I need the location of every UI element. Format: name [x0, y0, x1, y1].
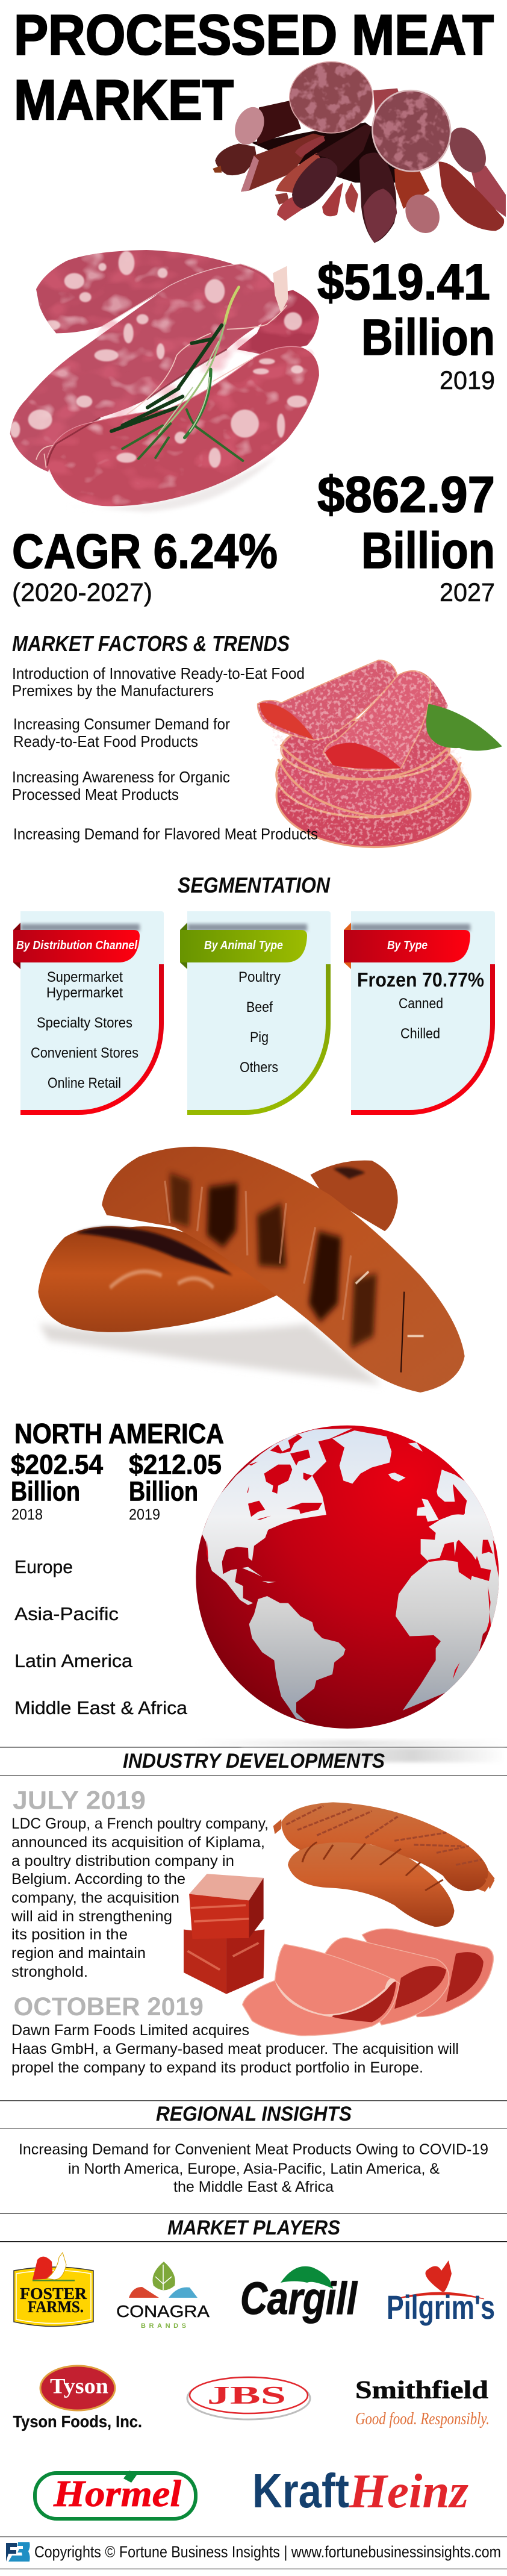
icon: rosemary sprig: [111, 287, 243, 461]
logo: Kraft Heinz: [252, 2464, 468, 2518]
CAGR: (2020-2027): [12, 578, 152, 607]
stat: north america 2019: [129, 1449, 222, 1523]
divider shadow above industry developments: [0, 1740, 507, 1748]
text block: market factors: Increasing Consumer Demand for: [13, 715, 230, 733]
market value 2027: $862.97: [317, 466, 495, 523]
CAGR: CAGR 6.24%: [12, 525, 278, 579]
image: assorted cured sausages: [213, 61, 506, 243]
text block: regional insights: in North America, Europe, Asia-Pacific, Latin America, &: [68, 2160, 440, 2177]
stat: north america 2018: 2018: [11, 1506, 43, 1523]
list: distribution channels: Specialty Stores: [37, 1015, 132, 1031]
heading: market factors and trends: MARKET FACTORS & TRENDS: [12, 631, 290, 656]
market value 2019: $519.41: [317, 254, 490, 310]
text block: market factors: [12, 664, 305, 803]
list: other regions: Middle East & Africa: [14, 1697, 188, 1718]
list: other regions: [14, 1556, 188, 1718]
text block: regional insights: [19, 2141, 488, 2195]
list: animal types: Beef: [246, 999, 273, 1015]
list: product types: [357, 968, 484, 1042]
image: grilled sausages: [38, 1147, 465, 1392]
icon: red globe: [196, 1426, 507, 1729]
logo: Foster Farms: FOSTER: [20, 2284, 87, 2303]
stat: north america 2018: $202.54: [11, 1449, 103, 1480]
text block: October 2019: [11, 1992, 459, 2076]
list: distribution channels: Supermarket: [47, 969, 123, 985]
stat: north america 2019: 2019: [129, 1506, 160, 1523]
logo: Tyson Foods: [13, 2366, 142, 2431]
heading: segmentation: SEGMENTATION: [178, 873, 331, 897]
panel: by animal type: By Animal Type: [204, 939, 283, 952]
logo: Conagra Brands: [116, 2262, 210, 2330]
logo: Kraft Heinz: Kraft: [252, 2464, 349, 2518]
panel: by type: [344, 911, 495, 1115]
text block: October 2019: Dawn Farm Foods Limited acquires: [11, 2022, 249, 2039]
list: distribution channels: Hypermarket: [46, 985, 123, 1001]
list: animal types: Others: [240, 1059, 278, 1076]
logo: JBS: JBS: [207, 2382, 286, 2410]
heading: market players: MARKET PLAYERS: [167, 2216, 340, 2239]
text block: October 2019: propel the company to expand its product portfolio in Europe.: [11, 2059, 423, 2076]
logo: Hormel: Hormel: [53, 2474, 182, 2515]
list: other regions: Europe: [14, 1556, 73, 1577]
logo: Conagra Brands: BRANDS: [141, 2322, 186, 2330]
panel: by type: By Type: [387, 939, 428, 952]
stat: north america 2019: $212.05: [129, 1449, 222, 1480]
text block: July 2019: region and maintain: [11, 1945, 146, 1962]
market value 2019: [317, 254, 495, 395]
heading: north america: NORTH AMERICA: [14, 1418, 224, 1449]
text block: market factors: Introduction of Innovative Ready-to-Eat Food: [12, 664, 305, 682]
logo: Smithfield: Smithfield: [355, 2377, 488, 2404]
text block: October 2019: OCTOBER 2019: [13, 1992, 204, 2021]
market value 2027: 2027: [440, 578, 495, 607]
stat: north america 2018: [11, 1449, 103, 1523]
text block: July 2019: a poultry distribution company in: [11, 1853, 234, 1870]
logo: Hormel: [35, 2471, 196, 2519]
text: flavored meat factor: Increasing Demand for Flavored Meat Products: [13, 825, 318, 843]
footer: [0, 2536, 507, 2569]
list: distribution channels: Convenient Stores: [31, 1045, 138, 1061]
image: raw sausages with rosemary: [6, 247, 319, 512]
market value 2027: [317, 466, 495, 607]
list: distribution channels: Online Retail: [48, 1075, 121, 1091]
icon: basil leaf: [426, 704, 502, 750]
logo: Cargill: Cargill: [240, 2273, 358, 2324]
text block: October 2019: Haas GmbH, a Germany-based meat producer. The acquisition will: [11, 2041, 459, 2057]
logo: JBS: [187, 2377, 310, 2419]
title: MARKET: [14, 68, 234, 131]
heading: regional insights: REGIONAL INSIGHTS: [156, 2103, 352, 2125]
text block: market factors: Ready-to-Eat Food Products: [13, 732, 198, 750]
list: distribution channels: [31, 969, 138, 1091]
market value 2019: 2019: [440, 366, 495, 395]
logo: Foster Farms: FARMS.: [28, 2298, 84, 2316]
text block: regional insights: the Middle East & Africa: [173, 2178, 334, 2195]
logo: Pilgrim's: [387, 2260, 495, 2326]
title: [14, 3, 494, 131]
stat: north america 2019: Billion: [129, 1476, 198, 1507]
CAGR: [12, 525, 278, 607]
list: product types: Frozen 70.77%: [357, 968, 484, 991]
text block: July 2019: LDC Group, a French poultry company,: [11, 1815, 269, 1832]
list: other regions: Asia-Pacific: [14, 1603, 119, 1624]
logo: Smithfield: [355, 2377, 490, 2428]
logo: Foster Farms: [14, 2253, 93, 2326]
logo: Tyson Foods: Tyson: [50, 2374, 108, 2398]
text block: market factors: Increasing Awareness for Organic: [12, 768, 230, 786]
panel: by distribution channel: By Distribution Channel: [16, 939, 137, 952]
text block: July 2019: company, the acquisition: [11, 1889, 179, 1906]
text block: July 2019: stronghold.: [11, 1963, 88, 1980]
text block: July 2019: Belgium. According to the: [11, 1871, 185, 1888]
text block: market factors: Processed Meat Products: [12, 785, 179, 803]
list: animal types: Pig: [250, 1029, 269, 1046]
logo: Conagra Brands: CONAGRA: [116, 2302, 210, 2321]
text block: July 2019: [11, 1786, 269, 1980]
panel: by animal type: [180, 911, 331, 1115]
list: animal types: [238, 969, 281, 1076]
heading: industry developments: INDUSTRY DEVELOPMENTS: [123, 1750, 385, 1773]
text block: July 2019: JULY 2019: [13, 1786, 146, 1815]
illustration: sausages, meat cubes and salami: [184, 1802, 495, 2036]
text block: July 2019: announced its acquisition of Kiplama,: [11, 1834, 265, 1851]
list: product types: Canned: [399, 996, 443, 1012]
text block: July 2019: will aid in strengthening: [11, 1908, 172, 1925]
icon: Fortune Business Insights mark: [6, 2542, 30, 2562]
list: product types: Chilled: [400, 1026, 440, 1042]
text block: regional insights: Increasing Demand for Convenient Meat Products Owing to COVID-19: [19, 2141, 488, 2158]
list: animal types: Poultry: [238, 969, 281, 985]
image: salami slices: [255, 658, 502, 850]
text block: market factors: Premixes by the Manufacturers: [12, 682, 214, 700]
panel: by distribution channel: [13, 911, 164, 1115]
stat: north america 2018: Billion: [11, 1476, 80, 1507]
heading: industry developments: [0, 1748, 507, 1776]
fat blotches: [10, 251, 307, 468]
list: other regions: Latin America: [14, 1650, 133, 1671]
text block: July 2019: its position in the: [11, 1926, 128, 1943]
logo: Kraft Heinz: Heinz: [349, 2465, 468, 2518]
logo: Tyson Foods: Tyson Foods, Inc.: [13, 2412, 142, 2431]
